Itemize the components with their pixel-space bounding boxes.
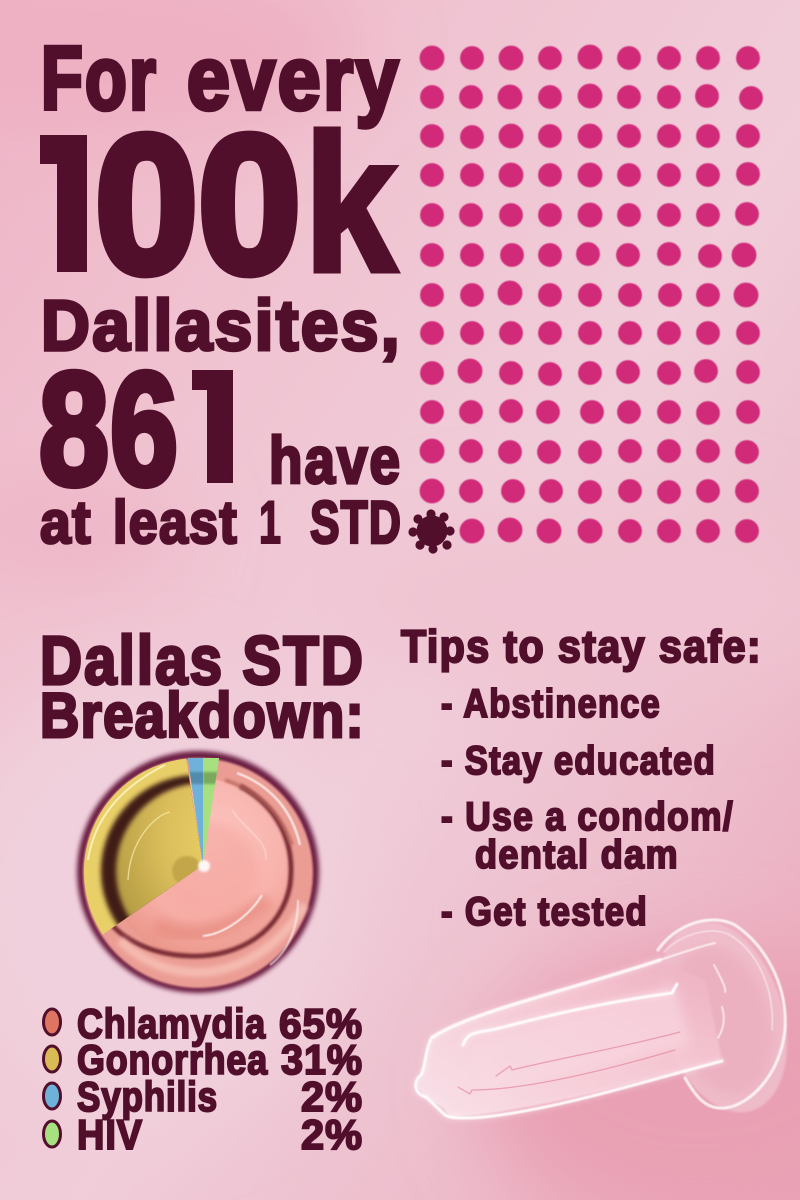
big number: 100k: 0 xyxy=(198,95,301,314)
condom highlights xyxy=(416,920,785,1118)
tip: abstinence: - Abstinence xyxy=(441,682,661,726)
heading line: For every xyxy=(41,29,401,129)
legend row: Gonorrhea: Gonorrhea xyxy=(77,1036,268,1083)
big number: 861: 8 xyxy=(39,339,109,518)
central highlight xyxy=(198,860,210,872)
heading line: For every: For xyxy=(41,29,158,129)
heading line: at least 1 STD: STD xyxy=(310,489,402,556)
big number: 861: 6 xyxy=(110,339,178,518)
legend row: Chlamydia: Chlamydia xyxy=(77,1000,266,1047)
illustration: condom xyxy=(416,906,800,1128)
tip: stay educated: - Stay educated xyxy=(441,739,716,783)
big number: 100k: k xyxy=(304,94,398,313)
tip: get tested: - Get tested xyxy=(441,890,648,934)
legend row: HIV: 2% xyxy=(301,1111,363,1158)
tips heading: Tips to stay safe: xyxy=(401,621,762,672)
legend row: Gonorrhea: 31% xyxy=(281,1036,363,1083)
big number: 100k: 1 xyxy=(40,101,87,313)
heading line: For every: every xyxy=(187,29,401,129)
big number: 100k xyxy=(40,126,401,278)
legend row: Chlamydia: 65% xyxy=(279,1000,363,1047)
legend row: Chlamydia xyxy=(44,1000,363,1047)
tip: use a condom or dental dam xyxy=(441,795,734,877)
blue syphilis wedge xyxy=(188,758,203,862)
heading: Dallas STD Breakdown: Breakdown: xyxy=(40,681,365,751)
big number: 100k: 0 xyxy=(95,95,198,314)
pie chart: cervix painting with STD shares xyxy=(60,740,319,993)
condom body xyxy=(416,960,722,1118)
condom glow xyxy=(416,960,722,1118)
condom creases xyxy=(458,1032,680,1094)
heading line: at least 1 STD xyxy=(40,489,402,556)
tips panel xyxy=(401,621,762,934)
legend row: Syphilis: Syphilis xyxy=(77,1073,218,1120)
heading line: Dallasites: Dallasites, xyxy=(41,287,402,366)
legend row: HIV xyxy=(44,1111,363,1158)
legend: STD percentages xyxy=(44,1000,363,1158)
salmon chlamydia disc xyxy=(108,773,305,972)
heading: Dallas STD Breakdown xyxy=(40,622,365,751)
big number: 861 xyxy=(40,368,233,490)
tip: use a condom or dental dam: - Use a condom/ xyxy=(441,795,734,839)
yellow gonorrhea wedge xyxy=(84,758,202,934)
dark outer ring xyxy=(77,751,319,993)
icon: virus dot xyxy=(408,509,455,554)
condom base ring xyxy=(637,906,800,1128)
title: for every 100k Dallasites, 861 have at least 1 STD xyxy=(39,29,402,556)
heading line: at least 1 STD: at xyxy=(40,489,92,556)
legend row: HIV: HIV xyxy=(77,1111,143,1158)
green HIV wedge xyxy=(203,758,220,862)
dot grid: 100 thousand people xyxy=(420,45,762,543)
heading word: have: have xyxy=(269,423,402,497)
tip: use a condom or dental dam: dental dam xyxy=(475,833,679,877)
heading line: at least 1 STD: 1 xyxy=(259,489,281,556)
heading: Dallas STD Breakdown: Dallas STD xyxy=(40,622,365,699)
heading line: at least 1 STD: least xyxy=(113,489,238,556)
title: for every 100k Dallasites, 861 have at least 1 STD: 1 xyxy=(192,338,233,517)
legend row: Syphilis: 2% xyxy=(301,1073,363,1120)
legend row: Syphilis xyxy=(44,1073,363,1120)
